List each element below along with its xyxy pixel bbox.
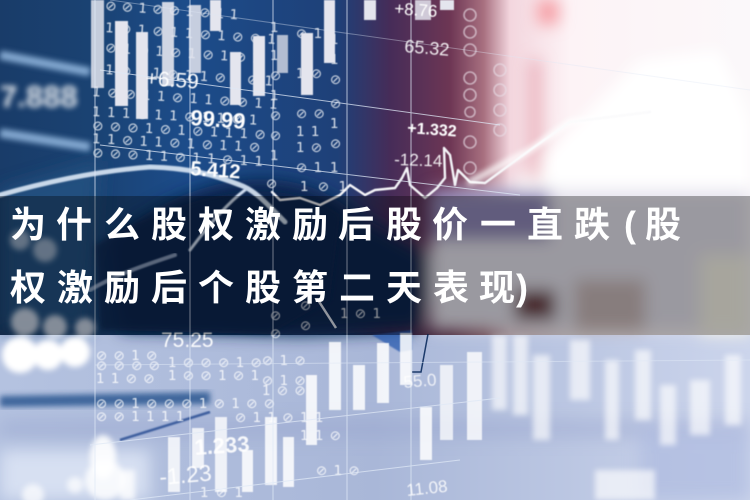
chart numbers: [145, 0, 457, 500]
digital number grid: 1: [270, 48, 279, 64]
digital number grid: ⊘: [270, 326, 281, 342]
digital number grid: ⊘ 1 ⊘: [262, 353, 306, 369]
digital number grid: 1 ⊘ ⊘ 1 1 ⊘ 1 1 ⊘ ⊘ 1 1: [92, 84, 278, 113]
digital number grid: ⊘ 1 ⊘ 1 ⊘ 1 ⊘ 1 ⊘ 1: [105, 40, 262, 67]
digital number grid: ⊘ ⊘ 1 ⊘: [96, 348, 157, 364]
digital number grid: ⊘: [330, 96, 341, 112]
digital number grid: ⊘: [300, 298, 311, 314]
digital number grid: ⊘: [270, 308, 281, 324]
right blurred bars: [492, 335, 741, 500]
chart numbers: 5.412: [190, 158, 241, 183]
digital number grid: [92, 0, 381, 500]
chart numbers: 55.0: [403, 370, 437, 392]
faint bead columns: [464, 9, 506, 174]
digital number grid: ⊘ ⊘ ⊘ 1 ⊘ 1 ⊘ 1 1 1 ⊘: [92, 118, 266, 143]
chart numbers: +6.59: [145, 67, 200, 94]
digital number grid: 1: [330, 116, 339, 132]
chart numbers: 1.233: [194, 431, 250, 460]
chart numbers: -1.23: [158, 460, 213, 490]
digital number grid: ⊘ 1 ⊘: [262, 373, 306, 389]
digital number grid: ⊘: [270, 68, 281, 84]
digital number grid: 1 ⊘ 1: [300, 179, 347, 195]
digital number grid: 1 1 ⊘ ⊘: [96, 371, 155, 387]
chart numbers: 99.99: [190, 105, 246, 134]
digital number grid: 1 ⊘: [296, 140, 322, 156]
digital number grid: 1 1 1 ⊘ 1 1 ⊘ 1 1 ⊘ 1: [92, 104, 258, 129]
chart numbers: 11.08: [405, 477, 448, 500]
digital number grid: 1 ⊘ ⊘ 1 ⊘ 1: [168, 368, 259, 384]
digital number grid: ⊘: [270, 108, 281, 124]
chart numbers: 75.25: [161, 329, 214, 352]
digital number grid: ⊘ ⊘ 1 ⊘ ⊘ ⊘ 1 ⊘ 1 ⊘ ⊘: [96, 396, 275, 412]
blurred left streaks and beads: [0, 55, 135, 500]
digital number grid: 1: [270, 20, 279, 36]
chart numbers: 65.32: [404, 36, 450, 60]
title: [10, 204, 681, 308]
digital number grid: ⊘: [300, 318, 311, 334]
chart numbers: +1.332: [407, 120, 457, 140]
digital number grid: ⊘ ⊘ ⊘ 1 1 ⊘ 1 1 ⊘ 1 1: [92, 145, 263, 170]
digital number grid: 1: [330, 160, 339, 176]
glowing white chart curve: [0, 112, 650, 290]
digital number grid: 1 1 ⊘: [300, 428, 341, 444]
digital number grid: 1: [330, 32, 339, 48]
digital number grid: 1 1: [296, 124, 319, 140]
digital number grid: ⊘ 1 1 ⊘ 1 1: [235, 410, 323, 426]
blurred hand and pen: [0, 192, 428, 440]
digital number grid: 1 ⊘: [296, 66, 322, 82]
title band: [0, 196, 750, 335]
title: 为什么股权激励后股价一直跌(股: [10, 204, 681, 245]
title: 权激励后个股第二天表现): [10, 267, 528, 308]
digital number grid: 1: [330, 52, 339, 68]
upper white candlestick bars: [91, 0, 454, 119]
chart numbers: -12.14: [394, 150, 443, 171]
digital number grid: ⊘ 1 ⊘: [316, 463, 360, 479]
digital number grid: 1: [270, 88, 279, 104]
digital number grid: ⊘ 1: [296, 160, 322, 176]
digital number grid: ⊘ ⊘ ⊘ ⊘: [96, 358, 160, 374]
digital number grid: 1 ⊘ 1 ⊘ 1 1 ⊘ 1 ⊘ ⊘ 1: [105, 20, 276, 48]
digital number grid: ⊘: [330, 136, 341, 152]
digital number grid: ⊘: [266, 176, 277, 192]
digital number grid: 1 ⊘ ⊘: [262, 383, 306, 399]
digital number grid: 1 ⊘ ⊘ ⊘ 1 ⊘: [168, 355, 262, 371]
digital number grid: ⊘ ⊘ 1 1 1 1: [96, 409, 184, 425]
digital number grid: 1 1 ⊘ 1 1 ⊘ 1 ⊘ 1 1 ⊘: [92, 131, 261, 156]
digital number grid: ⊘ 1: [296, 26, 322, 42]
digital number grid: 1 ⊘ 1: [340, 306, 381, 322]
digital number grid: 1 ⊘ 1 1 ⊘ 1 1 ⊘ 1 ⊘ 1: [105, 62, 274, 90]
lower white bars: [168, 333, 482, 492]
digital number grid: ⊘: [330, 72, 341, 88]
digital number grid: ⊘ ⊘: [296, 106, 325, 122]
blurred left streaks and beads: 7.888: [0, 79, 78, 114]
digital number grid: 1: [270, 148, 279, 164]
digital number grid: ⊘: [270, 128, 281, 144]
